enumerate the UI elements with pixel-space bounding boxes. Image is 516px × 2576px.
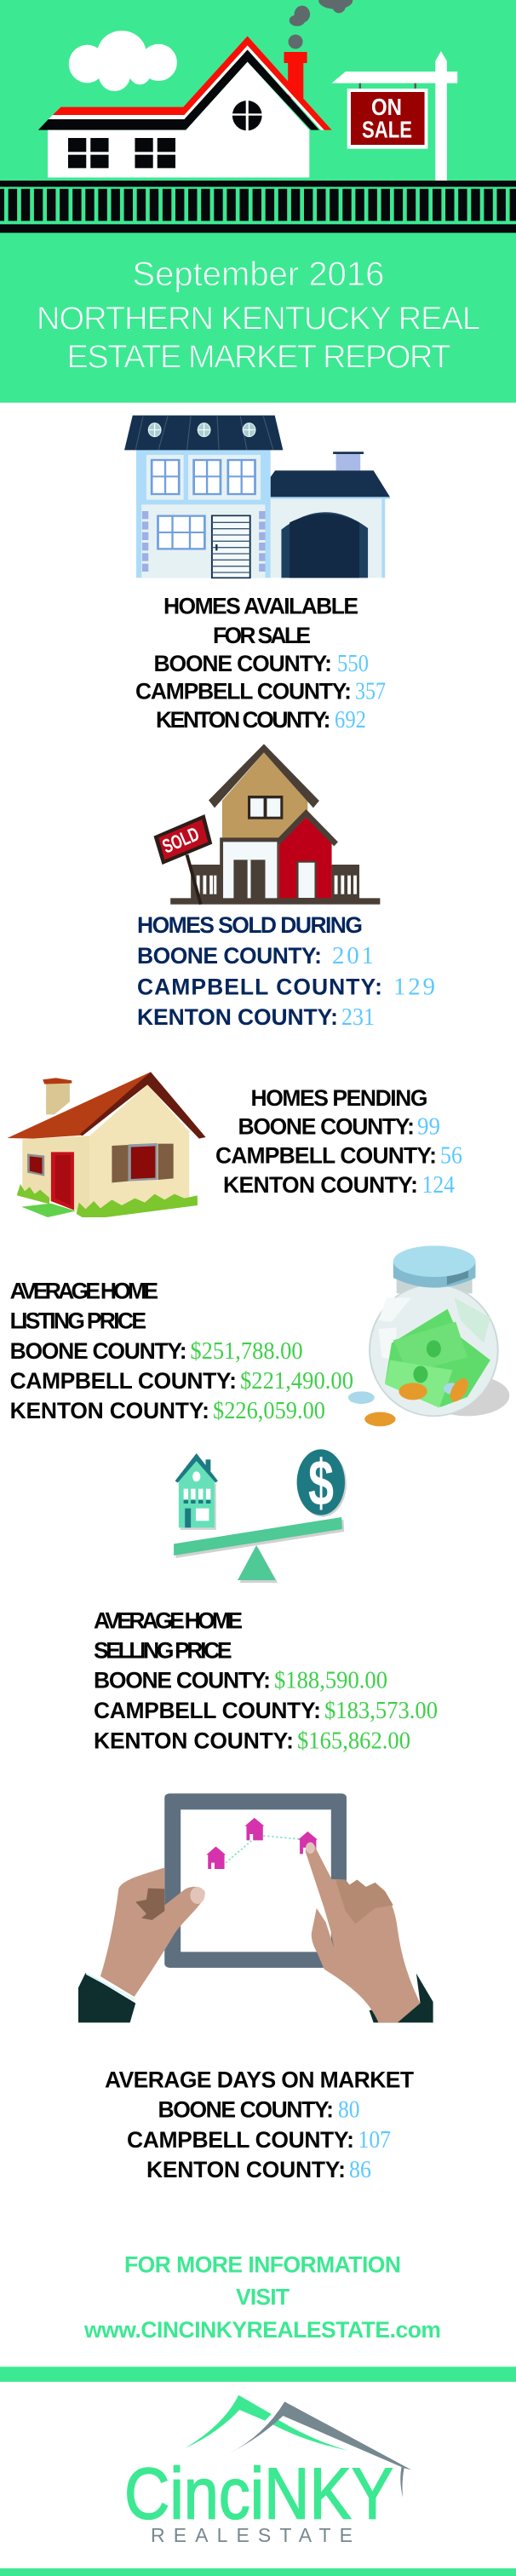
illustration: house, cloud and sign: [38, 0, 457, 181]
footer band: [0, 2366, 516, 2382]
icon: balance with house and dollar: [174, 1449, 347, 1583]
text block: listing price: LISTING PRICE: [10, 1308, 146, 1333]
text block: selling price: CAMPBELL COUNTY:: [94, 1698, 321, 1723]
text block: homes pending: 56: [440, 1142, 462, 1170]
dollar sign: $: [308, 1447, 334, 1520]
text block: homes sold: 201: [332, 942, 374, 969]
text block: homes pending: CAMPBELL COUNTY:: [215, 1143, 437, 1169]
text block: selling price: $165,862.00: [297, 1727, 410, 1754]
icon: sign post: [332, 51, 457, 181]
text block: homes sold: 129: [393, 973, 435, 1000]
text block: days on market: KENTON COUNTY:: [146, 2157, 346, 2182]
text block: days on market: 80: [338, 2096, 359, 2124]
text block: homes pending: 124: [422, 1171, 455, 1199]
text block: homes available: 692: [335, 706, 366, 733]
right hand: [306, 1843, 433, 2022]
text block: selling price: $183,573.00: [324, 1697, 438, 1724]
text block: homes available: CAMPBELL COUNTY:: [135, 679, 352, 704]
text block: days on market: 107: [358, 2126, 391, 2153]
icon: house: [38, 36, 332, 177]
text block: selling price: KENTON COUNTY:: [94, 1728, 294, 1753]
text block: listing price: $251,788.00: [190, 1337, 303, 1365]
text block: homes sold: KENTON COUNTY:: [137, 1004, 338, 1030]
text block: homes pending: BOONE COUNTY:: [238, 1114, 415, 1140]
icon: blue two-storey house: [124, 416, 390, 578]
text block: homes available: HOMES AVAILABLE: [163, 594, 358, 619]
text block: homes available: [135, 594, 386, 733]
call to action: VISIT: [236, 2285, 290, 2310]
call to action: www.CINCINKYREALESTATE.com: [83, 2317, 441, 2343]
panel: average days on market: [78, 1793, 433, 2183]
text block: homes sold: HOMES SOLD DURING: [137, 912, 363, 938]
text block: homes pending: [215, 1085, 462, 1199]
icon: hands holding tablet: [78, 1793, 433, 2022]
text block: homes available: 357: [355, 678, 386, 705]
icon: money jar: [348, 1245, 509, 1426]
text block: selling price: $188,590.00: [274, 1667, 387, 1694]
text block: selling price: AVERAGE HOME: [94, 1607, 243, 1633]
call to action: FOR MORE INFORMATION: [124, 2251, 401, 2277]
panel: homes available for sale: [124, 416, 390, 733]
text block: homes sold: 231: [341, 1003, 375, 1031]
text block: days on market: BOONE COUNTY:: [158, 2097, 334, 2123]
panel: header: [0, 0, 516, 403]
text block: listing price: KENTON COUNTY:: [10, 1398, 209, 1423]
icon: chimney smoke: [289, 0, 353, 49]
panel: average selling price: [94, 1447, 438, 1754]
panel: homes sold: [137, 744, 435, 1031]
call to action: [83, 2251, 441, 2343]
text block: days on market: CAMPBELL COUNTY:: [127, 2127, 354, 2153]
text block: homes pending: 99: [417, 1113, 440, 1141]
text block: listing price: [10, 1278, 353, 1424]
text block: days on market: [105, 2067, 414, 2183]
title: [37, 256, 480, 376]
text block: homes available: FOR SALE: [213, 623, 311, 648]
icon: cloud: [69, 31, 177, 91]
text block: listing price: AVERAGE HOME: [10, 1278, 158, 1303]
logo roof mark: [185, 2395, 411, 2498]
text block: homes sold: [137, 912, 435, 1031]
panel: average listing price: [10, 1245, 509, 1426]
sign text: [362, 94, 412, 143]
title: ESTATE MARKET REPORT: [66, 340, 451, 376]
fence: [0, 181, 516, 233]
logo subtitle: REALESTATE: [151, 2524, 353, 2546]
icon: cottage: [8, 1072, 206, 1217]
text block: listing price: $221,490.00: [240, 1367, 353, 1394]
panel: homes pending: [8, 1072, 462, 1217]
footer bar: [0, 2568, 516, 2576]
text block: days on market: 86: [349, 2156, 371, 2183]
text block: selling price: [94, 1607, 438, 1754]
icon: sold house: [153, 744, 380, 905]
text block: listing price: CAMPBELL COUNTY:: [10, 1368, 237, 1394]
text block: selling price: BOONE COUNTY:: [94, 1668, 271, 1693]
text block: homes pending: HOMES PENDING: [250, 1085, 427, 1111]
logo wordmark: CinciNKY: [124, 2454, 393, 2535]
sign text: sold: SOLD: [159, 822, 202, 858]
text block: homes sold: CAMPBELL COUNTY:: [137, 974, 382, 999]
left hand: [78, 1867, 205, 2022]
title: NORTHERN KENTUCKY REAL: [37, 302, 480, 337]
text block: homes available: KENTON COUNTY:: [156, 707, 330, 733]
logo: CinciNKY Real Estate: [124, 2395, 411, 2546]
text block: homes pending: KENTON COUNTY:: [223, 1172, 418, 1198]
text block: homes sold: BOONE COUNTY:: [137, 943, 322, 969]
text block: homes available: BOONE COUNTY:: [153, 651, 332, 676]
text block: homes available: 550: [337, 650, 369, 677]
text block: listing price: $226,059.00: [213, 1397, 325, 1424]
title: September 2016: [132, 256, 384, 293]
sign text: ON: [371, 94, 402, 120]
text block: listing price: BOONE COUNTY:: [10, 1338, 187, 1364]
text block: days on market: AVERAGE DAYS ON MARKET: [105, 2067, 414, 2093]
text block: selling price: SELLING PRICE: [94, 1638, 232, 1664]
sign text: SALE: [362, 117, 412, 143]
